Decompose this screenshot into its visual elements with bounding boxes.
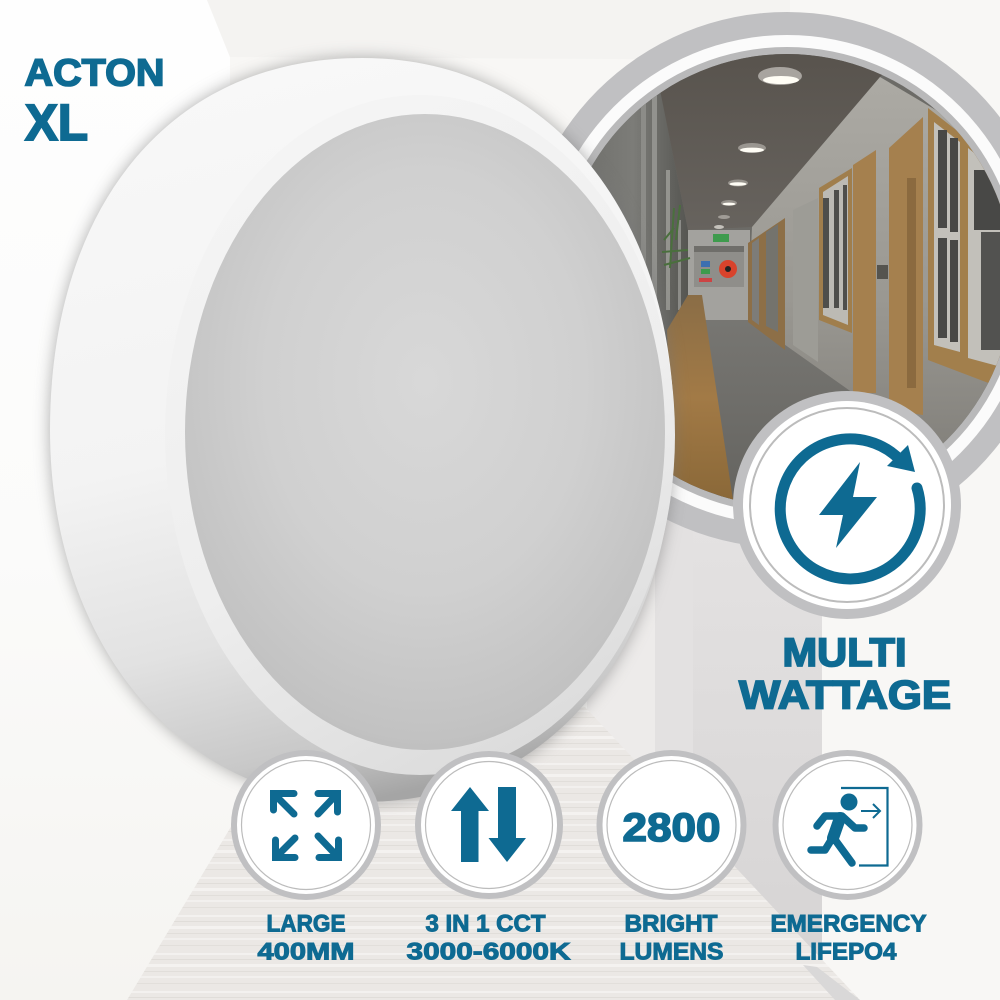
badge circle (231, 750, 381, 900)
label: multi wattage (739, 631, 951, 718)
label: EMERGENCY (770, 910, 926, 938)
photo: door two (889, 117, 923, 415)
lamp rim (165, 95, 675, 775)
icon: up and down arrows (451, 787, 526, 862)
label: 3 IN 1 CCT (426, 910, 546, 938)
photo: plant (662, 205, 690, 268)
lamp body (50, 58, 674, 802)
lamp lens (185, 114, 665, 750)
label: 3000-6000K (406, 938, 571, 966)
icon: expand arrows (274, 794, 338, 858)
photo: window near (819, 168, 852, 333)
badge circle (596, 750, 746, 900)
photo: wood strip (667, 295, 733, 500)
photo: hose reel (719, 260, 737, 278)
label: LUMENS (620, 938, 724, 966)
label: LIFEPO4 (796, 938, 897, 966)
feature: large 400mm (231, 750, 381, 966)
title: ACTON XL (24, 52, 164, 151)
ring: white (542, 35, 1000, 525)
icon: circular arrow (780, 439, 920, 579)
label (620, 910, 724, 966)
photo: exit sign (713, 234, 729, 242)
photo: far windows and doors (748, 218, 818, 362)
photo: ceiling lights (714, 67, 802, 229)
icon: emergency exit runner (811, 788, 888, 866)
lamp shadow (50, 58, 674, 802)
photo: corridor scene (592, 54, 1000, 500)
label: multi wattage: WATTAGE (739, 674, 951, 718)
label: 400MM (258, 938, 354, 966)
label: LARGE (266, 910, 346, 938)
photo: left wall (592, 92, 688, 325)
badge circle (772, 750, 922, 900)
label (406, 910, 571, 966)
label: multi wattage: MULTI (782, 631, 906, 675)
label (258, 910, 354, 966)
photo: light switch (877, 265, 888, 279)
title: ACTON XL: XL (25, 94, 88, 151)
photo: end wall (688, 230, 750, 320)
feature: emergency lifepo4 (770, 750, 926, 966)
badge circle (415, 751, 563, 899)
ring: outer grey (519, 12, 1000, 548)
label: BRIGHT (624, 910, 718, 938)
photo: concrete floor (706, 320, 850, 500)
ring: thin grey (554, 47, 1000, 513)
inset: corridor photo in ring (519, 12, 1000, 548)
icon: 2800 number: 2800 (622, 806, 720, 850)
product: round ceiling light (50, 58, 675, 802)
floor (127, 707, 860, 1000)
photo: ceiling (660, 54, 882, 230)
icon: lightning bolt (819, 462, 877, 548)
title: ACTON XL: ACTON (24, 52, 164, 94)
photo: door one (853, 150, 876, 393)
feature: bright lumens (596, 750, 746, 966)
badge: multi wattage icon (733, 391, 961, 619)
photo: right wall (752, 77, 988, 444)
photo: window far right (928, 108, 1000, 395)
label (770, 910, 926, 966)
feature: 3 in 1 cct (406, 751, 571, 966)
